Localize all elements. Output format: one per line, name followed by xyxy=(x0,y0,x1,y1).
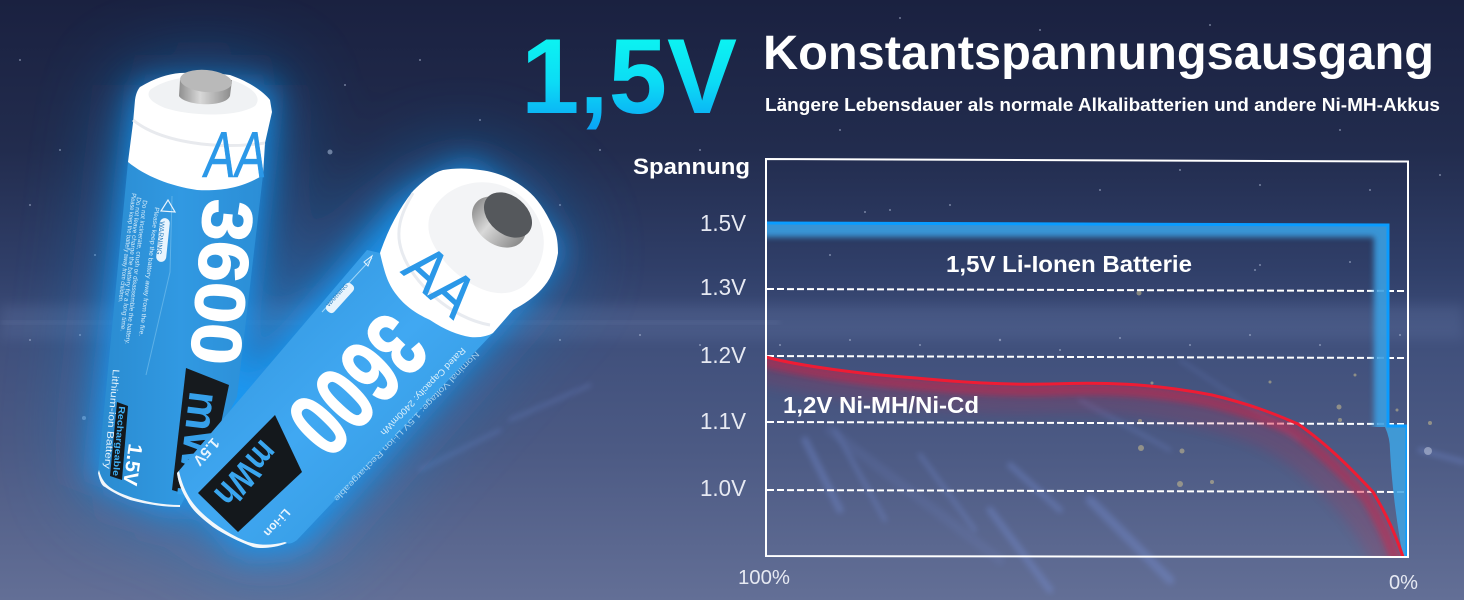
AA label: AA xyxy=(200,118,273,191)
battery: left AA cell xyxy=(98,68,273,507)
warning box xyxy=(322,256,372,315)
x axis labels: 0% xyxy=(1389,572,1418,594)
y axis labels: 1.2V xyxy=(700,342,747,368)
warning box xyxy=(117,193,175,375)
capacity text: Nominal Voltage: 1.5V Li-ion Rechargeable xyxy=(332,350,481,504)
warning box: Do not leave charge the battery for a long time. xyxy=(119,197,142,332)
dashed grid lines xyxy=(767,289,1406,492)
heading: Konstantspannungsausgang xyxy=(763,27,1434,80)
warning box: Please keep the battery away from the fire. xyxy=(137,207,160,337)
chart frame xyxy=(766,159,1408,557)
capacity text xyxy=(332,346,481,504)
nickel curve xyxy=(760,357,1403,570)
y axis labels xyxy=(700,210,747,501)
mWh box: mWh xyxy=(167,389,229,501)
AA label: AA xyxy=(391,232,490,330)
3600 label: 3600 xyxy=(268,295,446,474)
voltage text: 1.5V xyxy=(189,434,223,469)
y axis labels: 1.3V xyxy=(700,274,747,300)
voltage text: 1.5V xyxy=(118,442,146,488)
label: lithium-ion: 1,5V Li-Ionen Batterie xyxy=(946,251,1192,277)
rechargeable tag: Rechargeable xyxy=(111,406,127,476)
mWh box: mWh xyxy=(207,433,287,515)
battery body xyxy=(98,162,263,507)
y axis labels: 1.5V xyxy=(700,210,747,236)
battery terminal xyxy=(462,183,541,258)
mWh box xyxy=(198,415,302,532)
warning box: WARNING xyxy=(326,283,350,308)
warning box: WARNING xyxy=(155,221,165,255)
rechargeable tag xyxy=(110,402,128,480)
x axis labels xyxy=(738,567,1418,594)
battery terminal xyxy=(179,68,233,104)
y axis labels: 1.0V xyxy=(700,475,747,501)
title: 1,5V: 1,5V xyxy=(521,16,737,136)
subheading: Längere Lebensdauer als normale Alkalibatterien und andere Ni-MH-Akkus xyxy=(765,95,1440,115)
battery body xyxy=(177,250,493,548)
3600 label: 3600 xyxy=(176,197,268,368)
chemistry text: Li-ion xyxy=(261,506,293,540)
battery cap xyxy=(380,168,558,337)
label: nickel: 1,2V Ni-MH/Ni-Cd xyxy=(783,392,979,418)
warning box: Do not incinerate, crush or disassemble the battery. xyxy=(123,200,148,345)
battery cap xyxy=(128,73,272,190)
lithium-ion curve xyxy=(740,223,1407,557)
battery: right AA cell xyxy=(177,168,558,548)
y axis labels: 1.1V xyxy=(700,408,747,434)
x axis labels: 100% xyxy=(738,567,790,589)
battery glow xyxy=(92,85,565,555)
battery type text: Lithium-ion Battery xyxy=(101,369,121,470)
warning box: Please keep the battery away from children. xyxy=(117,193,137,303)
chart: voltage curves xyxy=(633,154,1418,594)
y axis title: Spannung xyxy=(633,154,750,179)
capacity text: Rated Capacity: 2400mWh xyxy=(379,346,468,437)
